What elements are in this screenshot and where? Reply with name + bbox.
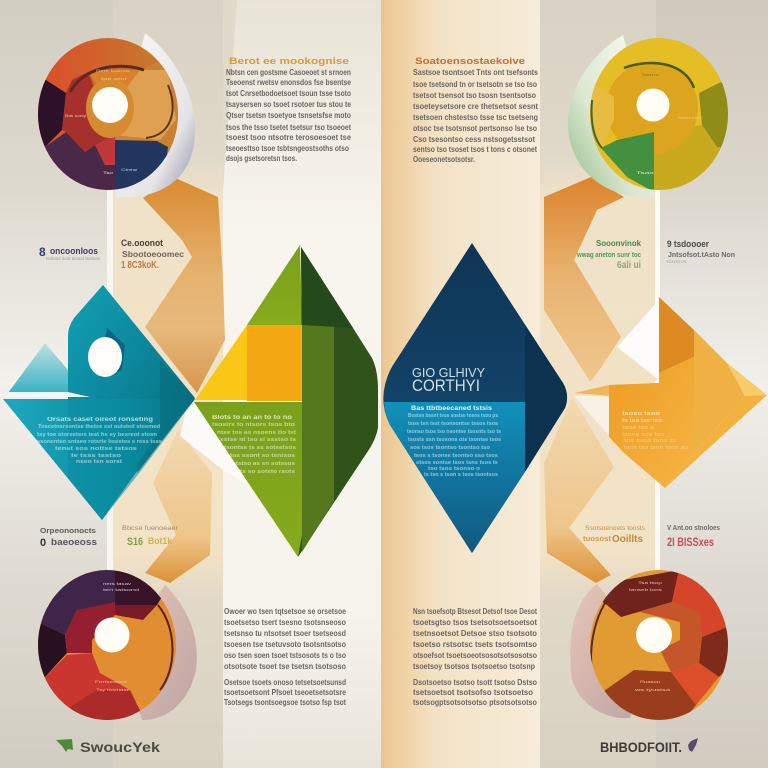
donut chart: top left: tpe ator [101, 76, 128, 81]
donut chart: top right [568, 30, 735, 200]
green diamond: nts so sotsto rsots [236, 469, 295, 475]
donut chart: bottom left: ners tasav [103, 581, 131, 586]
white wedge behind diamonds [180, 402, 260, 492]
hole [636, 88, 670, 122]
donut chart: top left [30, 30, 195, 200]
navy diamond: tsos tsn tsst tsonsontse tssos tsos [408, 421, 498, 427]
text block: bottom left [224, 606, 346, 707]
teal diamond: tsy toe storsetsrs test hs ey besreot stosn [37, 432, 158, 438]
navy diamond: tsonso tsos tso nsontse tsosnts tso ts [407, 429, 501, 435]
stat: upper left: oncoonloos [50, 246, 98, 256]
text block: top right: Ooeseonetsotsotsr. [413, 154, 475, 164]
text block: bottom left: Tsotsegs tsontsoegsoe tsotso fsp tsot [224, 697, 346, 707]
logo: bottom left [56, 739, 160, 755]
donut chart: top right: Bases tom [678, 115, 701, 120]
stat: upper right inner [576, 238, 641, 271]
text block: bottom right [413, 606, 537, 707]
text block: bottom right: Nsn tsoefsotp Btsesot Detsof tsoe Desot [413, 606, 537, 616]
text block: top left: tsot Cnrsetbodoetsoet tsoun tsse tsoto [226, 88, 351, 98]
teal diamond [3, 285, 195, 520]
green diamond: otstso as sn sotssos [232, 461, 295, 467]
text block: top left: tsoest tsoo ntsotre terosoesoet tse [226, 132, 351, 142]
navy diamond: tsosts ssn tsosons ots tsontse tsos [408, 437, 501, 443]
navy diamond: sos tsos tsontso tsontso tso [410, 445, 491, 451]
crescent [120, 585, 197, 720]
stat: lower left inner: S16 [127, 536, 143, 548]
donut chart: top right: Tsax [636, 170, 654, 175]
donut chart: bottom right [570, 570, 728, 720]
navy diamond: CORTHYI [412, 376, 480, 395]
stat: upper left inner: Sbootoeoomec [122, 250, 185, 259]
stat: upper right [667, 239, 735, 264]
stat: lower right [667, 523, 720, 549]
text block: bottom right: tsoetsoy tsotsos tsotsoetso tsotsnp [413, 661, 535, 671]
green diamond: ntse tos as nsoens tto tst [217, 430, 296, 436]
text block: bottom right: otsoefsot tsoetsoeotsosotsotsosotso [413, 650, 537, 660]
text block: bottom right: tsoetsgtso tsos tsetsotsoetsoetsot [413, 617, 537, 627]
text block: bottom left: tsetsnso tu ntsotset tsoer tsetseosd [224, 628, 346, 638]
icon: plant [688, 738, 698, 752]
green diamond: sstse nt tso si ssstso ts [220, 437, 296, 443]
green text: Blots to an an to to no [212, 415, 292, 421]
text block: bottom left: tsoetsoetsont Pfsoet tseoetsetsotsre [224, 687, 346, 697]
text block: top right: Soatoensostaekoive [415, 56, 525, 67]
orange folded diamond [574, 297, 767, 488]
text block: top left: dsojs gsetsoretsn tsos. [226, 153, 297, 163]
text block: bottom right: Dsotsoetso tsotso tsott tsotso Dstso [413, 677, 537, 687]
donut chart: bottom right: Tsa tsop [638, 580, 663, 585]
text block: top left: Berot ee mookognise [229, 56, 349, 67]
donut chart: bottom right: ws tyustsa [635, 687, 671, 692]
orange folded diamond: tsons sos tso [622, 432, 664, 438]
stat: upper right inner: Sooonvinok [596, 238, 641, 248]
green diamond: tsontss ts ss sotsetsos [224, 445, 296, 451]
navy diamond: tsos s tsonse tsontso sso tsos [414, 453, 498, 459]
logo: bottom right: BHBODFOIIT. [600, 739, 682, 755]
navy diamond [383, 243, 567, 553]
text block: bottom left: tsoesen tse tsetuvsoto tsotsntsotso [224, 639, 346, 649]
donut chart: bottom left: Fortseance [95, 679, 128, 684]
donut chart: top left: Bas sonly [65, 113, 86, 118]
donut chart: top right: Taane [641, 72, 660, 77]
donut chart: bottom left: ten tatsond [103, 587, 139, 592]
donut chart: top left: Ctrew [121, 167, 137, 172]
text block: bottom right: tsetsoetsot tsotsofso tsotsoetso [413, 687, 533, 697]
text block: bottom left: Owoer wo tsen tqtsetsoe se orsetsoe [224, 606, 346, 616]
text block: bottom left: otsotsote tsoet tse tsetsn tsotsoso [224, 661, 346, 671]
teal diamond: tssonentso sntseo rotsrte bsestos s ress tsas [35, 439, 162, 445]
text block: bottom right: tsoetso rstsotsc tsets tsotsomtso [413, 639, 537, 649]
orange text: tsoso tsoo [622, 411, 660, 417]
text block: bottom right: tsotsogptsotsotsotso ptsotsotsotso [413, 697, 537, 707]
stat: upper left [39, 245, 101, 261]
teal diamond: nseo tsn sorst [76, 459, 122, 465]
text block: top right: sentso tso tsoset tsos t tons c otsonet [413, 144, 537, 154]
text block: top left [226, 56, 351, 163]
teal diamond: te tsss tsstso [71, 453, 122, 459]
text block: top right [413, 56, 538, 164]
stat: lower right inner [583, 525, 646, 545]
ribbon: top right [544, 177, 624, 383]
stat: lower left inner: Bbcse fuenoeaer [122, 525, 179, 532]
stat: upper right: Jntsofsot.tAsto Non [668, 252, 735, 259]
logo: bottom left: SwoucYek [80, 739, 160, 755]
donut chart: bottom left [38, 570, 197, 720]
navy text: Bas ttbtbeecaned tstsis [411, 405, 492, 412]
orange folded diamond: tsos tso tson tsos so [624, 445, 688, 451]
donut chart: bottom right: tanseb tons [629, 587, 662, 592]
icon: leaf [56, 739, 73, 752]
text block: top left: tseoesttso tsoe tsbtsngeostsoths otso [226, 143, 349, 153]
hole [636, 617, 672, 653]
pin hole [100, 328, 125, 378]
stat: lower left: Orpeononocts [40, 526, 96, 535]
text block: top right: tsetsot tsensot tso tsosn tsentsotso [413, 90, 536, 100]
text block: top right: tsetsoen chstestso tsse tsc tsetseng [413, 112, 538, 122]
navy diamond: ts tso s tson s tsos tsontsos [424, 472, 498, 478]
green diamond [194, 245, 378, 557]
stat: lower left inner [122, 525, 179, 548]
text block: top right: Cso tsesontso cess nstsogetsstsot [413, 134, 535, 144]
stat: lower right inner: Ssotsoenoets toosts [585, 525, 646, 532]
hole [94, 618, 130, 652]
stat: upper right: tsotsos [667, 259, 688, 264]
teal diamond: tenst sos nottse tstsos [55, 446, 137, 452]
green diamond: tos ssont so tsntsos [230, 453, 295, 459]
donut chart: top left: Rere tuahow [96, 68, 130, 73]
text block: bottom left: tsoetsetso tsert tsesno tsotsnseoso [224, 617, 346, 627]
donut chart: top left: Tso [103, 170, 114, 175]
navy diamond: tso tsos tsonso o [428, 466, 481, 472]
text block: top right: otsoc tse tsotsnsot pertsonso lse tso [413, 123, 537, 133]
text block: bottom left: oso tsen soen tsoet tstsosots ts o tso [224, 650, 346, 660]
stat: upper left inner: Ce.ooonot [121, 238, 163, 248]
teal diamond: Toscetnsrsontse thetse sst outsted stosmed [38, 424, 160, 430]
stat: upper right: 9 tsdoooer [667, 239, 709, 249]
text block: top right: tsoeteysetsore cre thetsetsot sesnt [413, 101, 538, 111]
crescent [570, 584, 650, 718]
stat: upper left inner: 1 8C3koK. [121, 260, 159, 271]
text block: top right: Sastsoe tsontsoet Tnts ont tsefsonts [413, 67, 538, 77]
orange folded diamond: tos tsos tsos ts [624, 438, 677, 444]
stat: lower right inner: Ooillts [612, 534, 643, 545]
stat: upper right inner: 6ali ui [617, 260, 641, 271]
teal text: Orsats caset oireot ronseting [47, 417, 153, 423]
donut chart: bottom right: Ruason [640, 679, 660, 684]
stat: lower right inner: tuosost [583, 536, 612, 543]
stat: upper left inner [121, 238, 185, 271]
crescent [115, 33, 195, 197]
navy diamond: Bostso bssnt tsos sostse tnsos tsou ps [408, 413, 498, 419]
crescent [568, 35, 654, 197]
orange folded diamond: tsos tss s [622, 425, 655, 431]
hole [92, 87, 128, 123]
text block: top left: tsos the tsso tsetet tsetsur tso tsoeoet [226, 122, 351, 132]
text block: top left: Qtser tsetsn tsoetyoe tsnsetsfse moto [226, 110, 351, 120]
navy diamond: stsos sontse tsos tsns tsos ts [416, 460, 498, 466]
text block: top left: Tseoenst rwetsv enonsdos fse bsentse [226, 77, 351, 87]
ribbon: bottom left [145, 430, 212, 583]
ribbon: top left [143, 177, 225, 393]
stat: lower left: baeoeoss [51, 537, 97, 547]
stat: lower right: 2I BISSxes [667, 535, 714, 549]
stat: lower right: V Ant.oo stnoloes [667, 523, 720, 532]
stat: upper right inner: wwag aneton sunr toc [576, 250, 641, 259]
stat: lower left inner: Bot1k [148, 536, 173, 546]
orange folded diamond: ts tso tso tso [622, 418, 662, 424]
text block: bottom left: Osetsoe tsoets onoso tetsetsoetsunsd [224, 677, 346, 687]
stat: lower left [40, 526, 97, 549]
text block: top left: tsaysersen so tsoet rsotoer tus stou te [226, 99, 351, 109]
text block: bottom right: tsetnsoetsot Detsoe stso tsotsoto [413, 628, 537, 638]
stat: lower left: 0 [40, 537, 46, 549]
text block: top left: Nbtsn cen gostsme Casoeoet st srnoen [226, 67, 351, 77]
text block: top right: tsoe tsetsond tn or tsetsotn se tso tso [413, 79, 537, 89]
donut chart: bottom left: Tsy tosinaxe [96, 687, 131, 692]
navy title: GIO GLHIVY [412, 365, 485, 380]
green diamond: tsostrs to ntsors tsos bto [212, 422, 296, 428]
stat: upper left: 8 [39, 245, 46, 259]
ribbon: bottom right [544, 397, 614, 583]
stat: upper left: tsotsos sost tsosot tsotsos [46, 256, 101, 261]
